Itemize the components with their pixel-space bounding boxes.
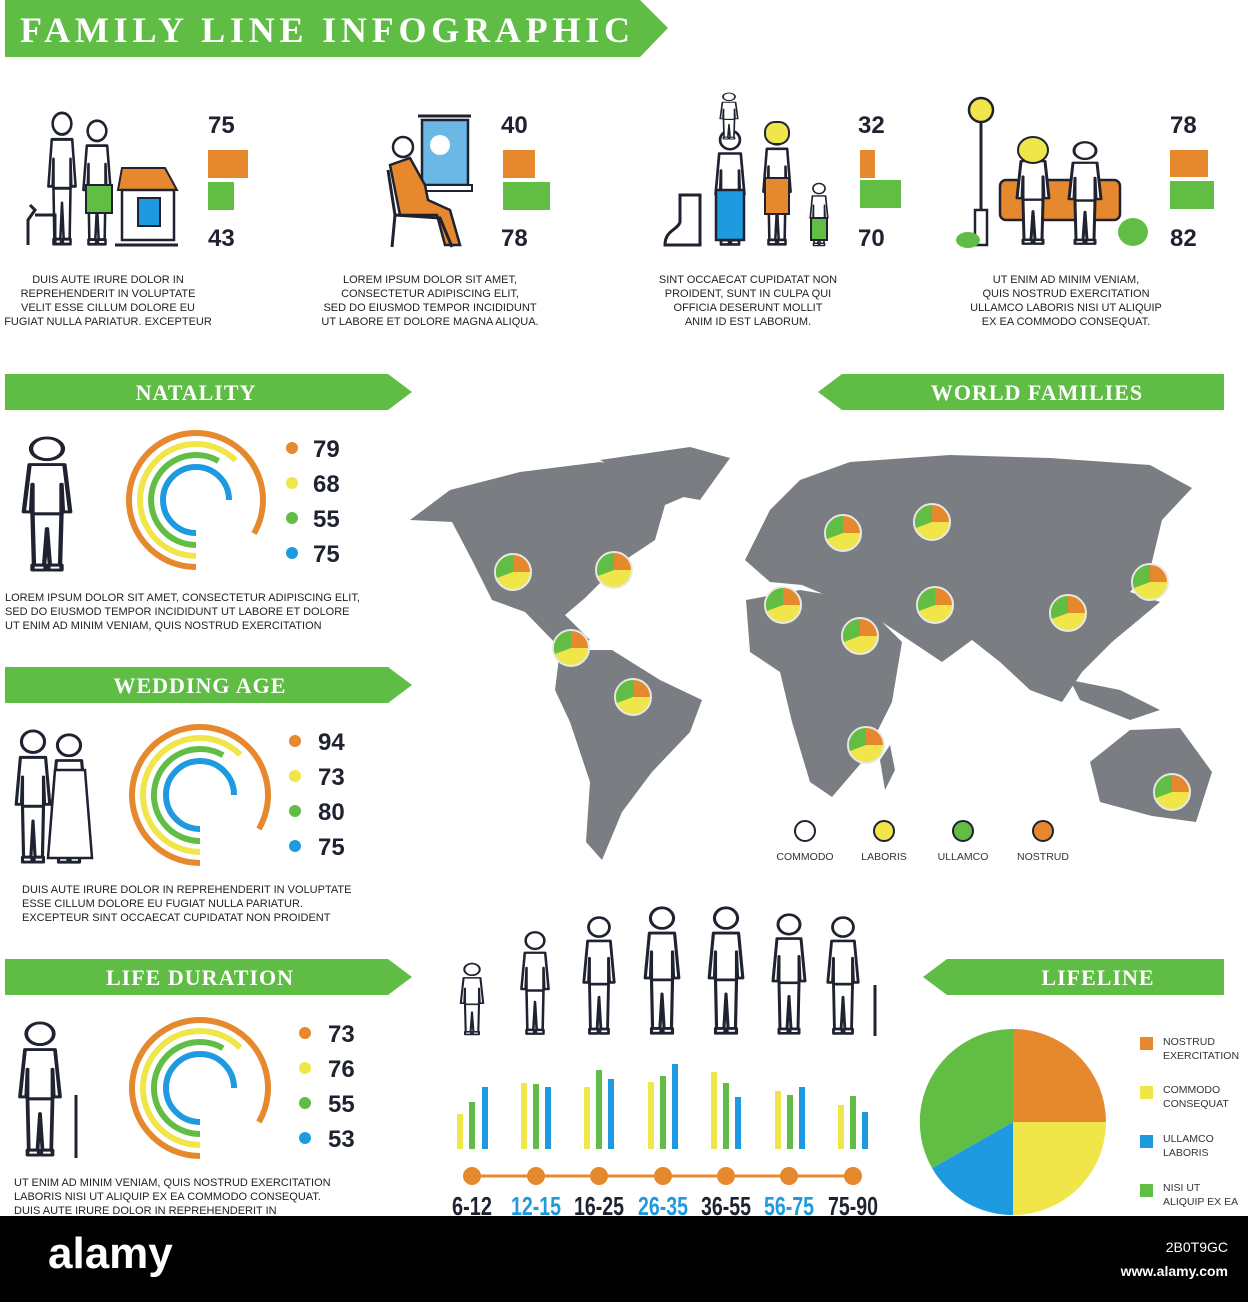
- lifeline legend: COMMODO: [1163, 1084, 1220, 1096]
- item 1: couple with house: 43: [208, 225, 235, 252]
- legend wedding: [289, 729, 345, 861]
- text natality: SED DO EIUSMOD TEMPOR INCIDIDUNT UT LABORE ET DOLORE: [5, 606, 350, 618]
- map pie markers: [495, 504, 1190, 810]
- icon: boy with skateboard: [24, 438, 70, 570]
- title banner: FAMILY LINE INFOGRAPHIC: [20, 10, 630, 50]
- text natality: LOREM IPSUM DOLOR SIT AMET, CONSECTETUR ADIPISCING ELIT,: [5, 592, 360, 604]
- legend natality: 75: [313, 541, 340, 568]
- banner: life duration: LIFE DURATION: [106, 965, 294, 990]
- bar chart by age: [457, 1064, 868, 1149]
- timeline with age labels: 6-12: [452, 1191, 492, 1221]
- text: SED DO EIUSMOD TEMPOR INCIDIDUNT: [323, 302, 537, 314]
- map legend: NOSTRUD: [1017, 851, 1069, 863]
- map legend: LABORIS: [861, 851, 907, 863]
- text: ULLAMCO LABORIS NISI UT ALIQUIP: [970, 302, 1162, 314]
- radial chart wedding: [132, 727, 268, 863]
- footer watermark band: alamy: [48, 1229, 173, 1278]
- legend life: 53: [328, 1126, 355, 1153]
- text: SINT OCCAECAT CUPIDATAT NON: [659, 274, 837, 286]
- item 1: couple with house: [4, 112, 248, 328]
- legend wedding: 80: [318, 799, 345, 826]
- text: VELIT ESSE CILLUM DOLORE EU: [21, 302, 195, 314]
- text: PROIDENT, SUNT IN CULPA QUI: [665, 288, 831, 300]
- icon: bride and groom: [16, 731, 92, 862]
- banner: world families: WORLD FAMILIES: [931, 380, 1143, 405]
- banner: natality: [5, 374, 412, 410]
- lifeline legend: LABORIS: [1163, 1147, 1209, 1159]
- timeline with age labels: 16-25: [574, 1191, 624, 1221]
- legend wedding: 94: [318, 729, 345, 756]
- text: EX EA COMMODO CONSEQUAT.: [982, 316, 1150, 328]
- item 2: pregnant woman: [321, 112, 550, 328]
- stats: 32: [858, 112, 885, 139]
- text: ANIM ID EST LABORUM.: [685, 316, 811, 328]
- lifeline legend: [1140, 1036, 1239, 1208]
- item 4: elderly on bench: [956, 98, 1214, 328]
- banner: life duration: [5, 959, 412, 995]
- timeline with age labels: [452, 1167, 878, 1221]
- timeline with age labels: 56-75: [764, 1191, 814, 1221]
- item 2: pregnant woman: 78: [501, 225, 528, 252]
- text wedding: EXCEPTEUR SINT OCCAECAT CUPIDATAT NON PROIDENT: [22, 912, 331, 924]
- text life: LABORIS NISI UT ALIQUIP EX EA COMMODO CONSEQUAT.: [14, 1191, 321, 1203]
- legend life: 73: [328, 1021, 355, 1048]
- item 4: elderly on bench: 82: [1170, 225, 1197, 252]
- timeline with age labels: 36-55: [701, 1191, 751, 1221]
- text: QUIS NOSTRUD EXERCITATION: [982, 288, 1150, 300]
- lifeline legend: ALIQUIP EX EA: [1163, 1196, 1238, 1208]
- banner: wedding age: [5, 667, 412, 703]
- text life: DUIS AUTE IRURE DOLOR IN REPREHENDERIT IN: [14, 1205, 277, 1217]
- map legend: ULLAMCO: [938, 851, 988, 863]
- footer watermark band: www.alamy.com: [1120, 1263, 1228, 1279]
- title banner: [5, 0, 668, 57]
- map legend: COMMODO: [776, 851, 834, 863]
- lifeline legend: ULLAMCO: [1163, 1133, 1214, 1145]
- text wedding: ESSE CILLUM DOLORE EU FUGIAT NULLA PARIATUR.: [22, 898, 303, 910]
- banner: natality: NATALITY: [136, 380, 256, 405]
- legend life: [299, 1021, 355, 1153]
- lifeline legend: NISI UT: [1163, 1182, 1201, 1194]
- item 3: family with kids: 70: [858, 225, 885, 252]
- stats: 78: [1170, 112, 1197, 139]
- radial chart life: [132, 1020, 268, 1156]
- radial chart natality: [129, 433, 263, 567]
- icon: pregnant woman at window: [388, 116, 472, 247]
- stats: 40: [501, 112, 528, 139]
- icon: couple house dog: [28, 113, 178, 245]
- timeline with age labels: 75-90: [828, 1191, 878, 1221]
- timeline with age labels: 12-15: [511, 1191, 561, 1221]
- lifeline pie chart: [920, 1029, 1106, 1215]
- timeline with age labels: 26-35: [638, 1191, 688, 1221]
- lifeline legend: EXERCITATION: [1163, 1050, 1239, 1062]
- text: DUIS AUTE IRURE DOLOR IN: [32, 274, 184, 286]
- lifeline legend: NOSTRUD: [1163, 1036, 1215, 1048]
- icon: old couple bench lamp: [956, 98, 1148, 248]
- legend natality: 68: [313, 471, 340, 498]
- text: CONSECTETUR ADIPISCING ELIT,: [341, 288, 519, 300]
- footer watermark band: [0, 1216, 1248, 1302]
- panel: natality: [5, 433, 360, 632]
- text: LOREM IPSUM DOLOR SIT AMET,: [343, 274, 517, 286]
- text: UT ENIM AD MINIM VENIAM,: [993, 274, 1139, 286]
- footer watermark band: 2B0T9GC: [1166, 1239, 1228, 1255]
- map legend: [776, 821, 1069, 863]
- age figures row: [461, 908, 875, 1036]
- text life: UT ENIM AD MINIM VENIAM, QUIS NOSTRUD EXERCITATION: [14, 1177, 331, 1189]
- stats: 75: [208, 112, 235, 139]
- world map: [410, 447, 1212, 863]
- banner: wedding age: WEDDING AGE: [114, 673, 286, 698]
- text: FUGIAT NULLA PARIATUR. EXCEPTEUR: [4, 316, 212, 328]
- legend wedding: 73: [318, 764, 345, 791]
- banner: lifeline: [923, 959, 1224, 995]
- banner: lifeline: LIFELINE: [1041, 965, 1155, 990]
- item 3: family with kids: [659, 93, 901, 328]
- lifeline legend: CONSEQUAT: [1163, 1098, 1229, 1110]
- legend wedding: 75: [318, 834, 345, 861]
- legend natality: 79: [313, 436, 340, 463]
- text: OFFICIA DESERUNT MOLLIT: [674, 302, 823, 314]
- legend natality: 55: [313, 506, 340, 533]
- legend natality: [286, 436, 340, 568]
- text wedding: DUIS AUTE IRURE DOLOR IN REPREHENDERIT IN VOLUPTATE: [22, 884, 351, 896]
- icon: old man with cane: [20, 1023, 76, 1158]
- text natality: UT ENIM AD MINIM VENIAM, QUIS NOSTRUD EXERCITATION: [5, 620, 322, 632]
- icon: family: [665, 93, 828, 246]
- banner: world families: [818, 374, 1224, 410]
- legend life: 76: [328, 1056, 355, 1083]
- legend life: 55: [328, 1091, 355, 1118]
- text: REPREHENDERIT IN VOLUPTATE: [21, 288, 195, 300]
- panel: wedding age: [16, 727, 351, 924]
- text: UT LABORE ET DOLORE MAGNA ALIQUA.: [321, 316, 539, 328]
- panel: life duration: [14, 1020, 355, 1217]
